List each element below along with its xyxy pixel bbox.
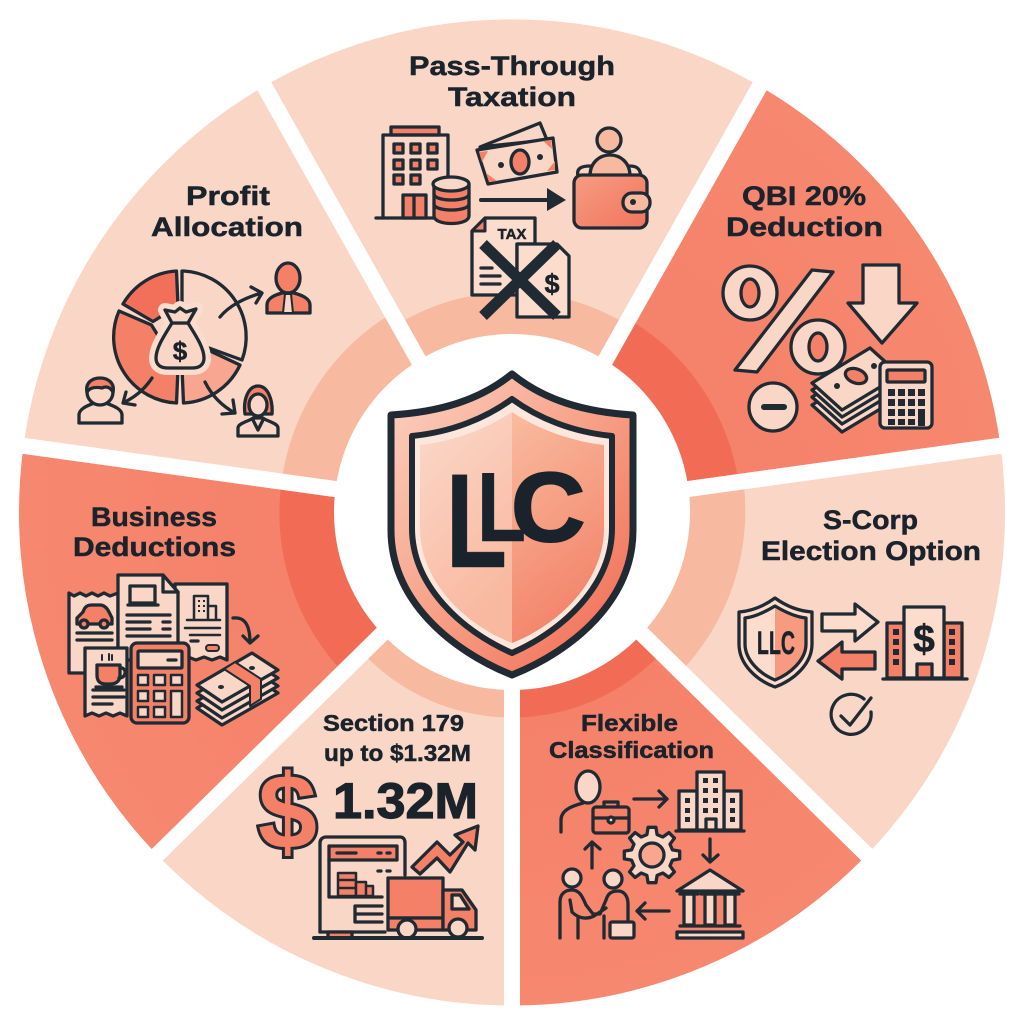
- panel: Business Deductions: [11, 445, 448, 860]
- panel: Section 179 up to $1.32M: [152, 569, 512, 1014]
- wedge background: [576, 445, 1013, 860]
- heading: [151, 181, 303, 242]
- arrow: down to bank: [703, 839, 718, 862]
- icon: money bag: [156, 308, 204, 368]
- heading: Deductions: [73, 532, 236, 562]
- icon: percent sign: [723, 266, 845, 374]
- icon: calculator: [880, 362, 932, 428]
- shield: [391, 374, 633, 675]
- amount: 1.32M: 1.32M: [333, 773, 478, 829]
- heading: [549, 710, 714, 763]
- icon: corporation building: $: [913, 618, 935, 661]
- panel: Profit Allocation: [16, 79, 469, 503]
- heading: S-Corp: [823, 505, 918, 535]
- pie chart: [114, 271, 246, 403]
- icon: office towers: [676, 772, 744, 831]
- panel: Flexible Classification: [512, 569, 872, 1014]
- icon: member in suit: [267, 263, 310, 313]
- heading: [761, 505, 981, 566]
- icon: money bag: $: [173, 336, 188, 366]
- center: LLC shield emblem: [334, 334, 690, 690]
- wedge background: [260, 11, 764, 450]
- LLC lettering: L: [477, 452, 526, 562]
- arrow: left: [818, 642, 875, 679]
- icon: cash bundle: [197, 653, 278, 725]
- icon: delivery truck: [314, 878, 482, 938]
- icon: minus circle: [749, 383, 797, 431]
- heading: [73, 502, 236, 562]
- icon: banknotes: [477, 123, 557, 184]
- icon: growth arrow: [412, 826, 478, 874]
- heading: Election Option: [761, 536, 981, 566]
- wedge background: [16, 79, 469, 503]
- heading: QBI 20%: [742, 181, 866, 211]
- heading: Pass-Through: [409, 51, 615, 81]
- wedge background: [152, 569, 512, 1014]
- arrow: left from bank: [637, 903, 669, 919]
- icon: small LLC shield: [739, 598, 812, 687]
- icon: equipment panel: [320, 837, 405, 938]
- wedge background: [512, 569, 872, 1014]
- heading: Classification: [549, 737, 714, 763]
- arrow: [481, 188, 566, 211]
- icon: bank: [677, 870, 743, 938]
- heading: [726, 181, 883, 242]
- icon: corporation building: [883, 607, 967, 679]
- LLC lettering: [446, 447, 585, 596]
- heading: Section 179: [323, 710, 464, 736]
- heading: [323, 710, 471, 766]
- wedge background: [555, 79, 1008, 503]
- arrow: right: [822, 604, 878, 641]
- heading: Deduction: [726, 212, 883, 242]
- icon: calculator: [131, 643, 189, 723]
- heading: Allocation: [151, 212, 303, 242]
- icon: coffee receipt: [85, 648, 127, 716]
- icon: gear: [624, 827, 680, 883]
- arrow: to cash: [233, 618, 258, 643]
- icon: dollar sign: $: [258, 753, 317, 871]
- panel: S-Corp Election Option: [576, 445, 1013, 860]
- icon: person with briefcase: [561, 771, 629, 833]
- icon: crossed-out tax documents: [472, 218, 569, 317]
- heading: [409, 51, 615, 112]
- icon: crossed-out tax documents: TAX: [498, 226, 526, 243]
- icon: money stack: [812, 348, 900, 432]
- arrows: distribution to members: [123, 287, 262, 414]
- heading: Flexible: [581, 710, 678, 736]
- icon: crossed-out tax documents: $: [544, 269, 560, 299]
- icon: handshake: [560, 869, 634, 938]
- heading: Taxation: [448, 82, 576, 112]
- icon: check mark: [831, 694, 871, 734]
- panel: QBI 20% Deduction: [555, 79, 1008, 503]
- icon: person in wallet: [574, 128, 650, 228]
- arrow: up to person: [585, 842, 600, 868]
- icon: female member: [238, 386, 278, 436]
- white hub: [334, 334, 690, 690]
- icon: laptop document: [118, 575, 178, 660]
- icon: male member: [79, 378, 122, 423]
- LLC lettering: C: [511, 453, 585, 562]
- wedge background: [11, 445, 448, 860]
- icon: down arrow: [848, 265, 917, 343]
- heading: up to $1.32M: [324, 740, 471, 766]
- panel: Pass-Through Taxation: [260, 11, 764, 450]
- LLC lettering: L: [446, 447, 507, 596]
- heading: Business: [91, 502, 217, 532]
- icon: building receipt: [175, 584, 227, 660]
- icon: office building with coins: [376, 127, 469, 224]
- icon: car receipt: [69, 593, 118, 673]
- arrow: to building: [634, 791, 667, 807]
- icon: small LLC shield: LLC: [757, 625, 795, 661]
- heading: Profit: [186, 181, 270, 211]
